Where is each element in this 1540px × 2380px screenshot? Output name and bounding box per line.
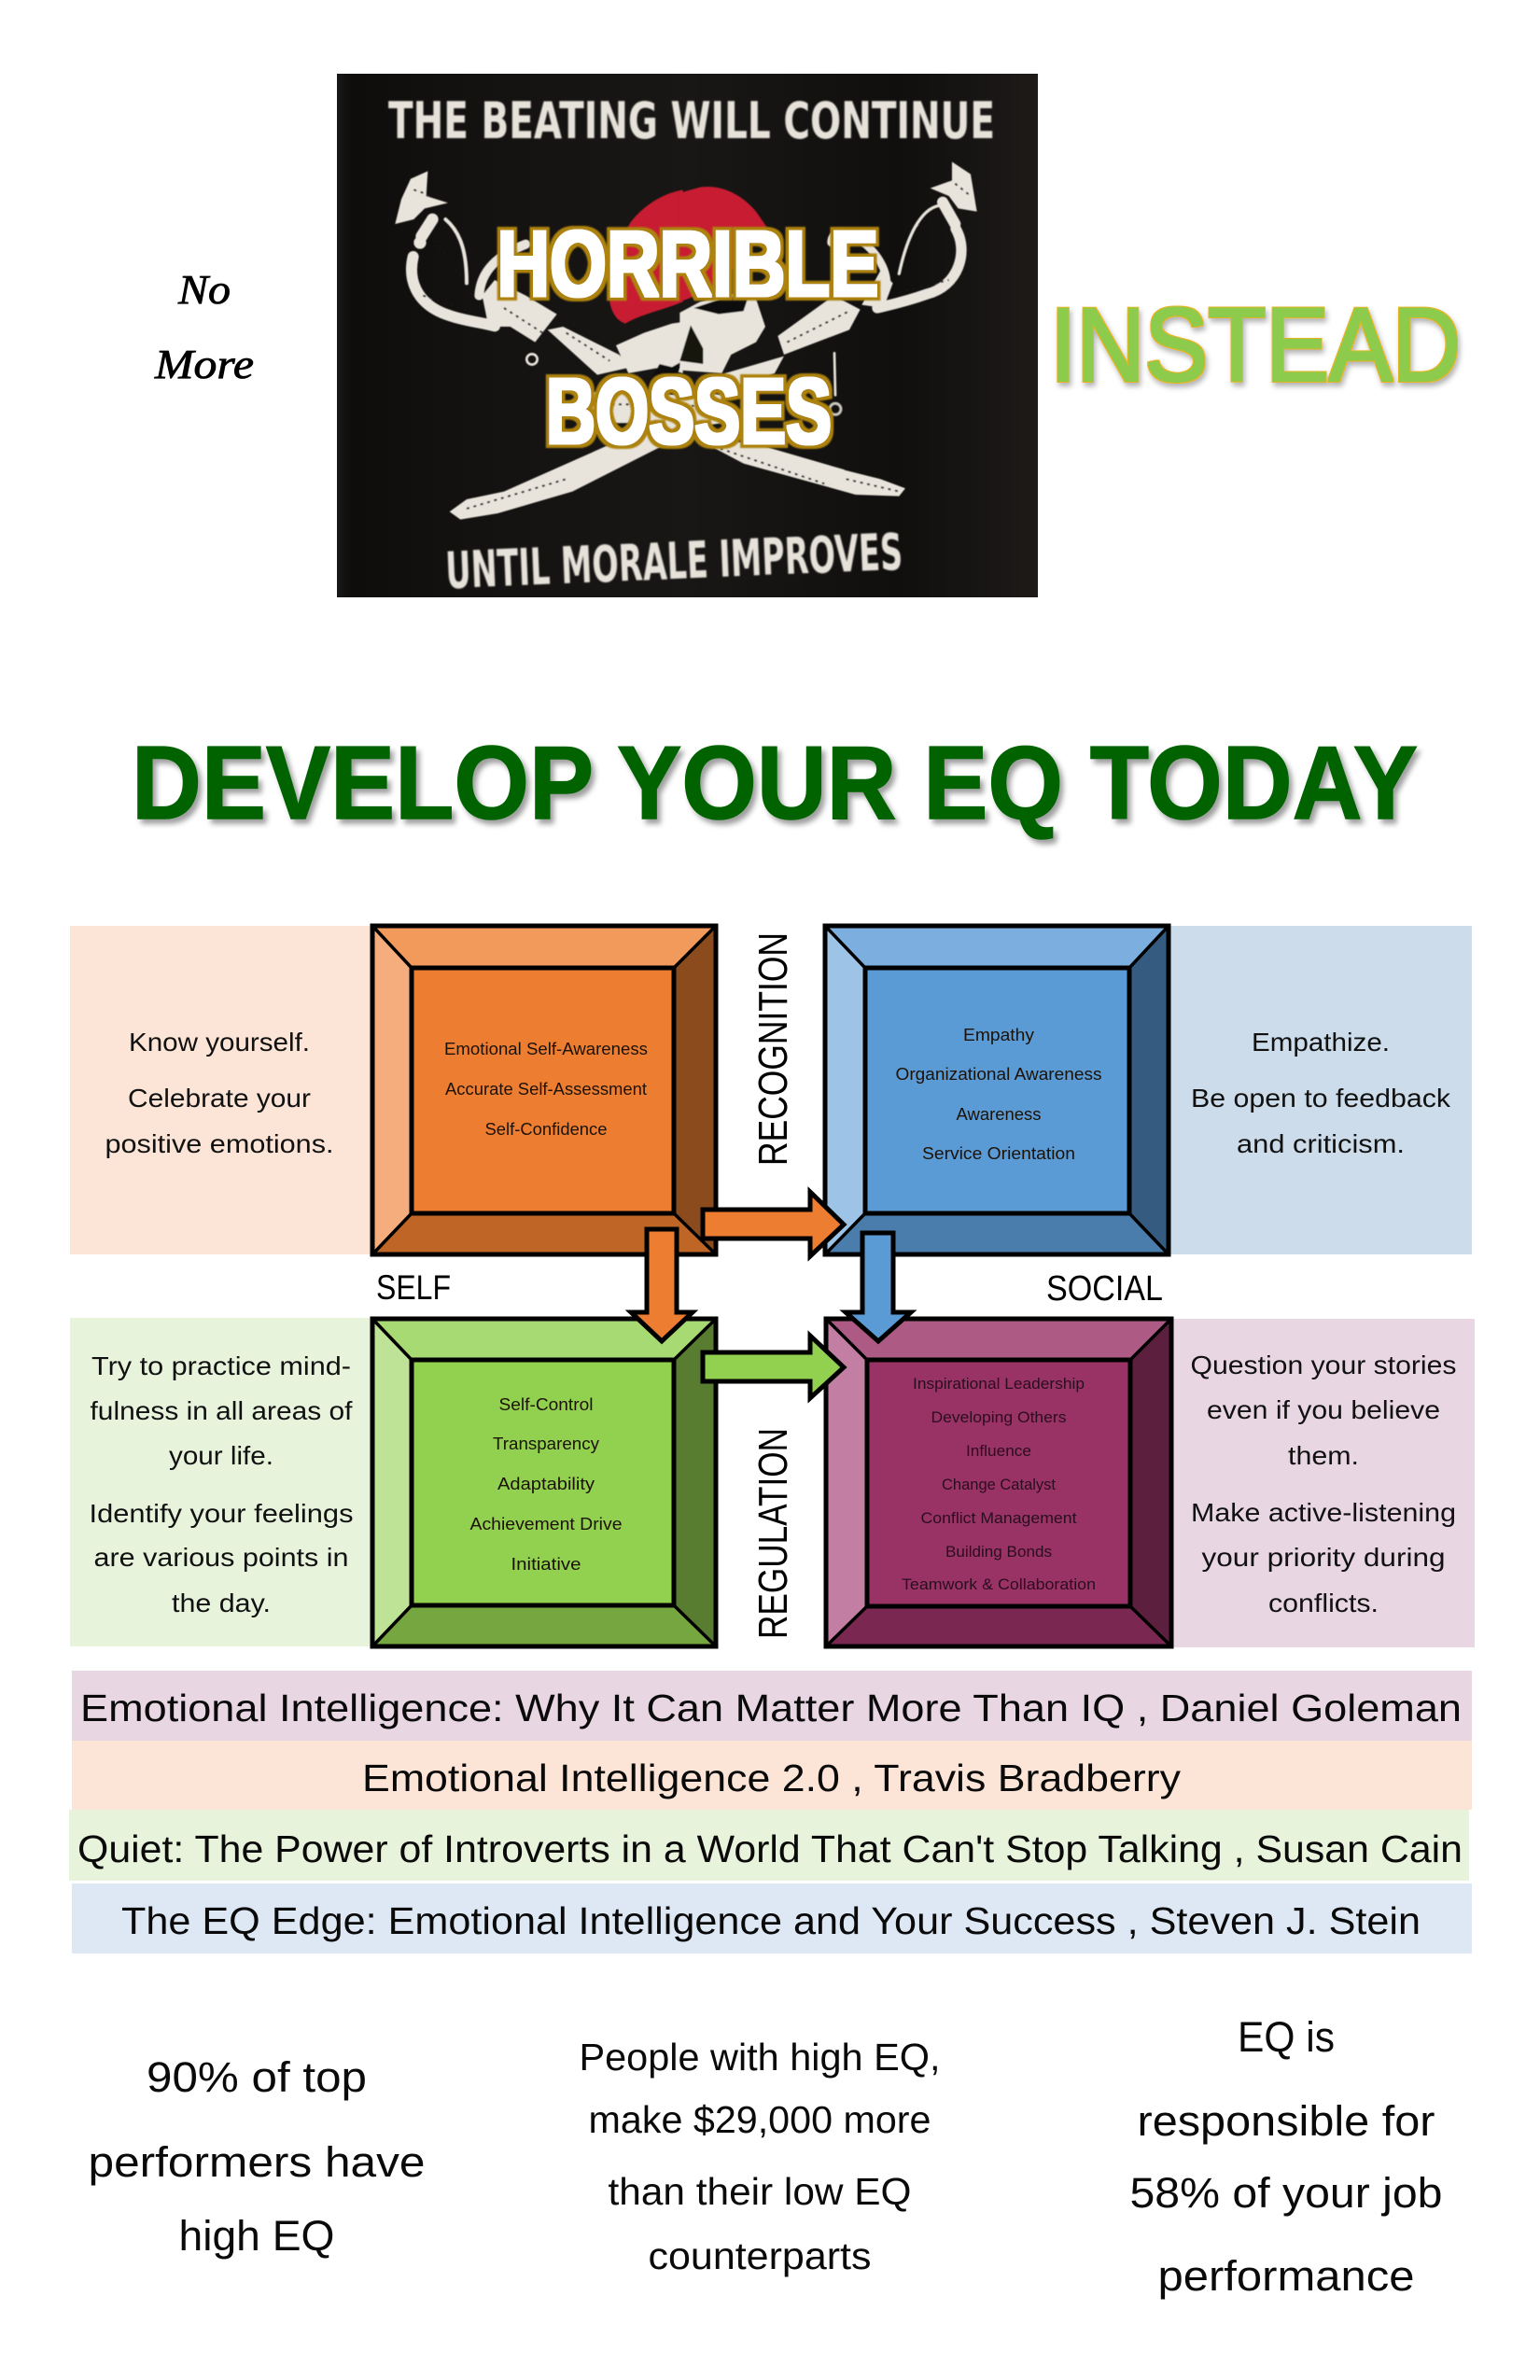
panel: social regulation advice: them. — [1288, 1441, 1359, 1470]
box: self regulation competencies: Achievement Drive — [470, 1515, 622, 1533]
panel: social regulation advice — [1173, 1319, 1475, 1647]
box: social regulation competencies: Inspirational Leadership — [913, 1375, 1085, 1393]
stat: top performers: 90% of top — [147, 2053, 367, 2101]
axis label: SOCIAL: SOCIAL — [1046, 1269, 1163, 1309]
box: social recognition competencies — [825, 926, 1169, 1254]
book: Cain: Quiet: The Power of Introverts in a World That Can't Stop Talking , Susan Cain — [77, 1827, 1463, 1870]
stat: salary: make $29,000 more — [588, 2098, 931, 2141]
box: social recognition competencies: Awareness — [956, 1105, 1042, 1124]
box: social regulation competencies: Influence — [966, 1442, 1031, 1460]
panel: social recognition advice: Empathize. — [1252, 1028, 1390, 1057]
left half of skull and swords — [395, 171, 683, 520]
label: No More: No — [177, 267, 231, 313]
axis label: SELF: SELF — [376, 1268, 451, 1307]
panel: social recognition advice — [1169, 926, 1472, 1254]
heading: HORRIBLE BOSSES: BOSSES — [546, 359, 832, 464]
panel: self regulation advice: are various points in — [93, 1543, 349, 1572]
book: Bradberry: Emotional Intelligence 2.0 , Travis Bradberry — [362, 1757, 1182, 1799]
arrow: orange right — [703, 1192, 844, 1256]
stat: salary: People with high EQ, — [579, 2036, 941, 2079]
book: Bradberry — [72, 1741, 1472, 1810]
pirate flag image — [337, 74, 1038, 600]
heading: HORRIBLE BOSSES: HORRIBLE — [497, 212, 879, 316]
arrow: blue down — [846, 1233, 911, 1341]
panel: social regulation advice: Make active-listening — [1191, 1498, 1456, 1527]
panel: self regulation advice: your life. — [169, 1441, 273, 1470]
box: self recognition competencies: Self-Confidence — [485, 1120, 607, 1139]
box: self regulation competencies: Transparency — [493, 1435, 599, 1453]
stat: job performance: responsible for — [1137, 2097, 1435, 2145]
stat: job performance: EQ is — [1238, 2013, 1335, 2061]
box: social recognition competencies: Service Orientation — [922, 1144, 1075, 1163]
box: social regulation competencies — [826, 1319, 1171, 1646]
box: social recognition competencies: Organizational Awareness — [896, 1065, 1101, 1084]
panel: social recognition advice: Be open to feedback — [1191, 1084, 1451, 1113]
book: Stein: The EQ Edge: Emotional Intelligence and Your Success , Steven J. Stein — [121, 1899, 1421, 1942]
stat: top performers — [88, 2053, 426, 2260]
panel: social regulation advice: your priority during — [1202, 1543, 1445, 1572]
box: self regulation competencies: Self-Control — [498, 1395, 594, 1414]
stat: job performance: 58% of your job — [1129, 2169, 1443, 2217]
label: No More — [154, 267, 254, 387]
stat: top performers: high EQ — [179, 2212, 334, 2260]
panel: self recognition advice: Know yourself. — [129, 1028, 310, 1057]
panel: social regulation advice: Question your stories — [1191, 1351, 1456, 1379]
box: social regulation competencies: Conflict Management — [920, 1509, 1077, 1527]
panel: social recognition advice: and criticism. — [1237, 1129, 1405, 1158]
box: self recognition competencies — [372, 926, 716, 1254]
box: self regulation competencies: Initiative — [511, 1555, 581, 1574]
stat: job performance — [1129, 2013, 1443, 2300]
axis label: REGULATION: REGULATION — [750, 1428, 796, 1639]
panel: self regulation advice — [70, 1318, 371, 1646]
box: social regulation competencies: Change Catalyst — [942, 1476, 1056, 1493]
heading: INSTEAD: INSTEAD — [1050, 287, 1461, 403]
flag top slogan: THE BEATING WILL CONTINUE — [388, 91, 995, 150]
flag bottom slogan: UNTIL MORALE IMPROVES — [444, 523, 903, 600]
box: social regulation competencies: Developing Others — [931, 1408, 1066, 1426]
book list — [69, 1671, 1472, 1953]
stat: salary: counterparts — [648, 2234, 872, 2277]
box: social regulation competencies: Building Bonds — [945, 1543, 1052, 1561]
panel: social regulation advice: even if you believe — [1207, 1395, 1440, 1424]
box: self regulation competencies — [372, 1319, 716, 1646]
panel: self recognition advice — [70, 926, 371, 1254]
book: Stein — [72, 1883, 1472, 1953]
arrow: orange down — [631, 1229, 693, 1341]
box: self recognition competencies: Emotional Self-Awareness — [444, 1040, 648, 1058]
panel: self regulation advice: Try to practice mind- — [91, 1351, 351, 1380]
box: self regulation competencies: Adaptability — [497, 1475, 595, 1493]
panel: self regulation advice: the day. — [172, 1589, 271, 1617]
panel: self recognition advice: Celebrate your — [128, 1084, 311, 1113]
panel: self recognition advice: positive emotions. — [105, 1129, 334, 1158]
box: social recognition competencies: Empathy — [963, 1026, 1034, 1044]
label: No More: More — [154, 342, 254, 387]
panel: self regulation advice: fulness in all areas of — [90, 1396, 353, 1425]
heading: HORRIBLE BOSSES — [497, 212, 879, 464]
stat: salary — [579, 2036, 941, 2277]
panel: social regulation advice: conflicts. — [1268, 1589, 1379, 1617]
panel: self regulation advice: Identify your feelings — [90, 1499, 353, 1528]
book: Goleman: Emotional Intelligence: Why It Can Matter More Than IQ , Daniel Goleman — [80, 1687, 1462, 1729]
title: DEVELOP YOUR EQ TODAY — [132, 725, 1418, 841]
arrow: green right — [703, 1336, 844, 1398]
book: Cain — [69, 1810, 1469, 1881]
right half of skull and swords — [679, 161, 977, 497]
stat: job performance: performance — [1157, 2252, 1415, 2300]
axis label: RECOGNITION: RECOGNITION — [750, 932, 796, 1166]
stat: salary: than their low EQ — [609, 2170, 911, 2213]
box: social regulation competencies: Teamwork & Collaboration — [902, 1575, 1096, 1593]
stat: top performers: performers have — [88, 2138, 426, 2186]
book: Goleman — [72, 1671, 1472, 1741]
box: self recognition competencies: Accurate Self-Assessment — [445, 1080, 647, 1099]
